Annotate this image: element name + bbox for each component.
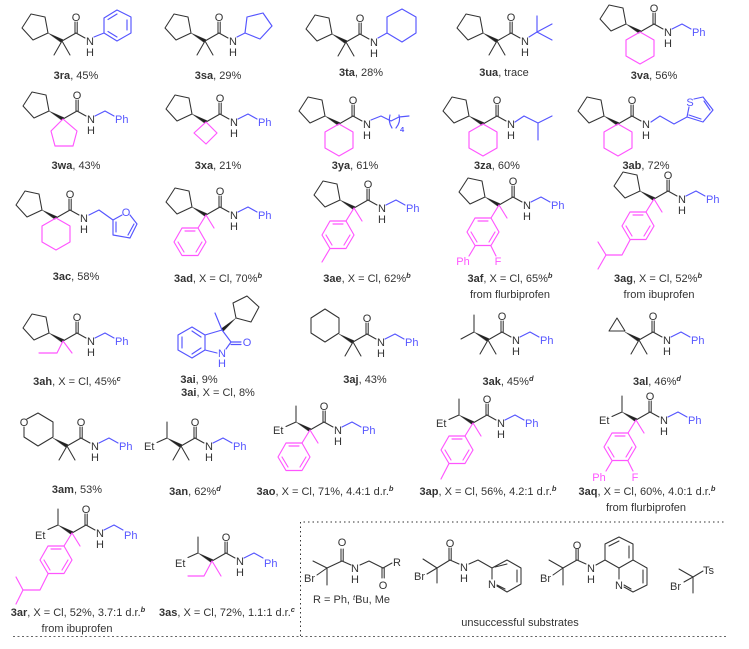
structure 3ai oxindole: O	[243, 337, 252, 349]
caption 3ya: 3ya, 61%	[332, 160, 378, 172]
compound 3ua	[457, 12, 552, 79]
compound 3ao	[257, 401, 394, 498]
structure 3ah: O	[73, 312, 82, 324]
compound 3xa	[166, 93, 271, 172]
structure 3ap: N	[497, 418, 505, 430]
structure 3as: O	[222, 532, 231, 544]
caption 3za: 3za, 60%	[474, 160, 520, 172]
structure 3am: N	[91, 441, 99, 453]
structure 3ya: O	[349, 95, 358, 107]
compound 3wa	[23, 90, 128, 172]
structure 3ua: O	[507, 12, 516, 24]
structure 3al	[609, 311, 704, 358]
structure 3aj: O	[363, 313, 372, 325]
caption 3ad: 3ad, X = Cl, 70%	[174, 273, 257, 285]
structure 3ac: N	[80, 213, 88, 225]
note: from ibuprofen: from ibuprofen	[42, 623, 112, 635]
structure 3xa: N	[230, 117, 238, 129]
structure 3ar: H	[96, 539, 104, 551]
structure 3ab: O	[628, 95, 637, 107]
caption 3ag: b	[697, 271, 702, 280]
structure 3aq: F	[632, 472, 639, 484]
compound 3aq	[579, 391, 716, 514]
structure 3aj	[311, 309, 418, 360]
substrate: bromo amide with pyridine: H	[460, 573, 468, 585]
structure 3wa: Ph	[115, 114, 128, 126]
structure 3ak: O	[498, 311, 507, 323]
structure 3ra: H	[86, 47, 94, 59]
structure 3ad	[166, 186, 271, 256]
structure 3wa: O	[73, 90, 82, 102]
structure 3aq: O	[646, 391, 655, 403]
caption 3al: 3al, 46%	[633, 376, 676, 388]
structure 3ao: H	[334, 436, 342, 448]
structure 3af: H	[523, 211, 531, 223]
compound 3am	[20, 413, 132, 496]
structure 3ag: O	[664, 170, 673, 182]
structure 3an	[144, 417, 246, 464]
compound 3va	[600, 3, 705, 82]
structure 3am: H	[91, 452, 99, 464]
structure 3va: N	[664, 27, 672, 39]
structure 3ac: O	[122, 207, 131, 219]
structure 3xa: H	[230, 128, 238, 140]
caption 3aq: b	[711, 484, 716, 493]
caption 3af: b	[548, 271, 553, 280]
structure 3am: O	[77, 417, 86, 429]
structure 3ak: H	[512, 346, 520, 358]
structure 3ao: O	[320, 401, 329, 413]
substrate: bromo amide with ketone: O	[338, 537, 347, 549]
caption 3ap: b	[552, 484, 557, 493]
note: from flurbiprofen: from flurbiprofen	[470, 289, 550, 301]
caption 3ae: b	[406, 271, 411, 280]
structure 3ua	[457, 12, 552, 59]
structure 3ah: Ph	[115, 336, 128, 348]
label: R groups: Bu, Me	[355, 594, 390, 606]
caption 3as: c	[291, 605, 296, 614]
structure 3ao: N	[334, 425, 342, 437]
structure 3va: Ph	[692, 27, 705, 39]
substrate: bromo amide with pyridine: N	[460, 562, 468, 574]
compound 3ya	[299, 95, 409, 172]
structure 3va: O	[650, 3, 659, 15]
caption 3sa: 3sa, 29%	[195, 70, 241, 82]
structure 3ad: H	[230, 221, 238, 233]
structure 3ah: H	[87, 347, 95, 359]
structure 3am	[20, 413, 132, 464]
structure 3ao: Et	[273, 425, 283, 437]
structure 3ak: Ph	[540, 335, 553, 347]
structure 3ag: H	[678, 205, 686, 217]
caption 3ai: 3ai, 9%	[180, 374, 218, 386]
structure 3aq: Et	[599, 415, 609, 427]
structure 3af: Ph	[551, 200, 564, 212]
structure 3ar: N	[96, 528, 104, 540]
substrate: bromo amide with quinoline	[540, 537, 647, 592]
compound 3ak	[461, 311, 553, 388]
caption 3ua: 3ua, trace	[479, 67, 529, 79]
substrate: bromo amide with ketone: N	[351, 563, 359, 575]
structure 3xa	[166, 93, 271, 144]
structure 3ap	[436, 394, 538, 479]
caption 3as: 3as, X = Cl, 72%, 1.1:1 d.r.	[159, 607, 291, 619]
substrate: bromo amide with ketone: H	[351, 574, 359, 586]
structure 3za: H	[507, 130, 515, 142]
structure 3ya: N	[363, 119, 371, 131]
compound 3aj	[311, 309, 418, 386]
compound 3ab	[578, 95, 713, 172]
structure 3va: H	[664, 38, 672, 50]
caption 3af: 3af, X = Cl, 65%	[467, 273, 548, 285]
structure 3ae: Ph	[406, 203, 419, 215]
structure 3ah	[23, 312, 128, 359]
caption 3am: 3am, 53%	[52, 484, 102, 496]
compound 3ar	[11, 504, 146, 635]
structure 3as	[175, 532, 277, 579]
structure 3sa	[165, 12, 272, 59]
structure 3aq: Ph	[592, 472, 606, 484]
structure 3af: O	[509, 176, 518, 188]
structure 3ya	[299, 95, 409, 156]
structure 3al: H	[663, 346, 671, 358]
structure 3ya: H	[363, 130, 371, 142]
compound 3ae	[314, 179, 419, 285]
structure 3ta: H	[370, 48, 378, 60]
structure 3ai oxindole: N	[218, 348, 226, 360]
compound 3sa	[165, 12, 272, 82]
compound 3ra	[22, 10, 131, 82]
structure 3za	[443, 95, 552, 156]
structure 3ar: O	[82, 504, 91, 516]
structure 3ad: N	[230, 210, 238, 222]
caption 3aj: 3aj, 43%	[343, 374, 387, 386]
structure 3ae	[314, 179, 419, 262]
structure 3ak	[461, 311, 553, 358]
structure 3ag: N	[678, 194, 686, 206]
structure 3aq: N	[660, 415, 668, 427]
substrate: bromo amide with quinoline: H	[587, 574, 595, 586]
structure 3ae: H	[378, 214, 386, 226]
structure 3ab: S	[686, 97, 694, 109]
structure 3sa: O	[215, 12, 224, 24]
structure 3wa	[23, 90, 128, 146]
structure 3ai oxindole: H	[218, 358, 226, 370]
structure 3ao: Ph	[362, 425, 375, 437]
substrate: bromo amide with quinoline: N	[615, 580, 623, 592]
caption 3ah: c	[117, 374, 122, 383]
label: R groups: R = Ph,	[313, 594, 350, 606]
caption 3an: d	[216, 484, 221, 493]
structure 3aj: Ph	[405, 337, 418, 349]
structure 3xa: O	[216, 93, 225, 105]
structure 3ap: Et	[436, 418, 446, 430]
label: R groups: t	[353, 593, 356, 602]
structure 3wa: N	[87, 114, 95, 126]
structure 3ad: O	[216, 186, 225, 198]
caption 3ac: 3ac, 58%	[53, 271, 99, 283]
structure 3wa: H	[87, 125, 95, 137]
structure 3as: H	[236, 567, 244, 579]
structure 3an: Ph	[233, 441, 246, 453]
structure 3an: O	[191, 417, 200, 429]
structure 3ak: N	[512, 335, 520, 347]
structure 3al: Ph	[691, 335, 704, 347]
caption 3aq: 3aq, X = Cl, 60%, 4.0:1 d.r.	[579, 486, 711, 498]
structure 3af	[456, 176, 564, 268]
structure 3ad: Ph	[258, 210, 271, 222]
substrate: bromo amide with pyridine	[414, 538, 521, 592]
compound 3al	[609, 311, 704, 388]
structure 3ac: O	[66, 189, 75, 201]
structure 3af: F	[495, 256, 502, 268]
substrate: bromo sulfone	[670, 565, 714, 593]
structure 3ar	[16, 504, 137, 604]
substrate: bromo amide with quinoline: O	[573, 540, 582, 552]
structure 3ag: Ph	[706, 194, 719, 206]
compound 3ad	[166, 186, 271, 285]
caption 3ae: 3ae, X = Cl, 62%	[323, 273, 406, 285]
structure 3am: O	[20, 417, 29, 429]
structure 3ao	[273, 401, 375, 470]
structure 3af: N	[523, 200, 531, 212]
structure 3sa: H	[229, 47, 237, 59]
substrate: bromo sulfone: Ts	[703, 565, 714, 577]
structure 3aq	[592, 391, 701, 484]
structure 3ab	[578, 95, 713, 156]
caption 3ra: 3ra, 45%	[54, 70, 99, 82]
structure 3ah: N	[87, 336, 95, 348]
substrate: bromo amide with quinoline: Br	[540, 573, 551, 585]
substrate: bromo amide with ketone: Br	[304, 573, 315, 585]
compound 3ah	[23, 312, 128, 388]
caption 3ah: 3ah, X = Cl, 45%	[33, 376, 117, 388]
compound 3ai	[178, 296, 259, 399]
caption 3ao: b	[389, 484, 394, 493]
caption 3ar: b	[141, 605, 146, 614]
substrate: bromo amide with ketone: R	[393, 557, 401, 569]
caption 3ag: 3ag, X = Cl, 52%	[614, 273, 697, 285]
structure 3as: Ph	[264, 558, 277, 570]
caption 3va: 3va, 56%	[631, 70, 677, 82]
structure 3af: Ph	[456, 256, 470, 268]
structure 3ag	[598, 170, 719, 269]
structure 3za: N	[507, 119, 515, 131]
structure 3aq: H	[660, 426, 668, 438]
structure 3va	[600, 3, 705, 64]
compound 3af	[456, 176, 564, 301]
note: from flurbiprofen: from flurbiprofen	[606, 502, 686, 514]
substrate: bromo amide with pyridine: N	[488, 579, 496, 591]
structure 3ya: 4	[400, 125, 405, 134]
caption 3wa: 3wa, 43%	[52, 160, 101, 172]
compound 3ap	[420, 394, 557, 498]
note: from ibuprofen: from ibuprofen	[624, 289, 694, 301]
structure 3ra: N	[86, 36, 94, 48]
structure 3ra	[22, 10, 131, 59]
caption 3ai chloride: 3ai, X = Cl, 8%	[181, 387, 255, 399]
substrate: bromo amide with quinoline: N	[587, 563, 595, 575]
structure 3an: Et	[144, 441, 154, 453]
caption 3ap: 3ap, X = Cl, 56%, 4.2:1 d.r.	[420, 486, 552, 498]
caption 3ta: 3ta, 28%	[339, 67, 383, 79]
caption 3ak: d	[529, 374, 534, 383]
structure 3ab: H	[642, 130, 650, 142]
structure 3as: N	[236, 556, 244, 568]
structure 3ac: H	[80, 224, 88, 236]
structure 3ua: H	[521, 47, 529, 59]
caption 3xa: 3xa, 21%	[195, 160, 241, 172]
structure 3sa: N	[229, 36, 237, 48]
compound 3as	[159, 532, 296, 619]
substrate: bromo amide with ketone	[304, 537, 401, 592]
substrate: bromo amide with pyridine: O	[446, 538, 455, 550]
structure 3ae: O	[364, 179, 373, 191]
structure 3ap: Ph	[525, 418, 538, 430]
structure 3an: N	[205, 441, 213, 453]
compound 3ac	[16, 189, 137, 283]
compound 3ag	[598, 170, 719, 301]
structure 3ar: Ph	[124, 530, 137, 542]
caption 3ad: b	[257, 271, 262, 280]
caption 3an: 3an, 62%	[169, 486, 216, 498]
structure 3ra: O	[72, 12, 81, 24]
structure 3ta: N	[370, 37, 378, 49]
compound 3ta	[306, 9, 416, 79]
substrate: bromo amide with ketone: O	[379, 580, 388, 592]
structure 3ae: N	[378, 203, 386, 215]
caption 3al: d	[676, 374, 681, 383]
structure 3ta: O	[356, 13, 365, 25]
structure 3ua: N	[521, 36, 529, 48]
structure 3za: O	[493, 95, 502, 107]
structure 3aj: H	[377, 348, 385, 360]
structure 3ta	[306, 9, 416, 60]
structure 3ap: O	[483, 394, 492, 406]
structure 3ai oxindole	[178, 296, 259, 370]
structure 3am: Ph	[119, 441, 132, 453]
compound 3za	[443, 95, 552, 172]
caption 3ab: 3ab, 72%	[622, 160, 670, 172]
structure 3as: Et	[175, 558, 185, 570]
structure 3ab: N	[642, 119, 650, 131]
panel: unsuccessful substrates	[13, 522, 727, 636]
substrate: bromo sulfone: Br	[670, 581, 681, 593]
caption 3ar: 3ar, X = Cl, 52%, 3.7:1 d.r.	[11, 607, 141, 619]
structure 3xa: Ph	[258, 117, 271, 129]
structure 3aq: Ph	[688, 415, 701, 427]
compound 3an	[144, 417, 246, 498]
caption 3ak: 3ak, 45%	[482, 376, 529, 388]
label: unsuccessful substrates: unsuccessful substrates	[461, 617, 579, 629]
structure 3an: H	[205, 452, 213, 464]
structure 3ap: H	[497, 429, 505, 441]
caption 3ao: 3ao, X = Cl, 71%, 4.4:1 d.r.	[257, 486, 389, 498]
substrate: bromo amide with pyridine: Br	[414, 571, 425, 583]
structure 3al: O	[649, 311, 658, 323]
structure 3ar: Et	[35, 530, 45, 542]
structure 3aj: N	[377, 337, 385, 349]
structure 3al: N	[663, 335, 671, 347]
structure 3ac	[16, 189, 137, 250]
